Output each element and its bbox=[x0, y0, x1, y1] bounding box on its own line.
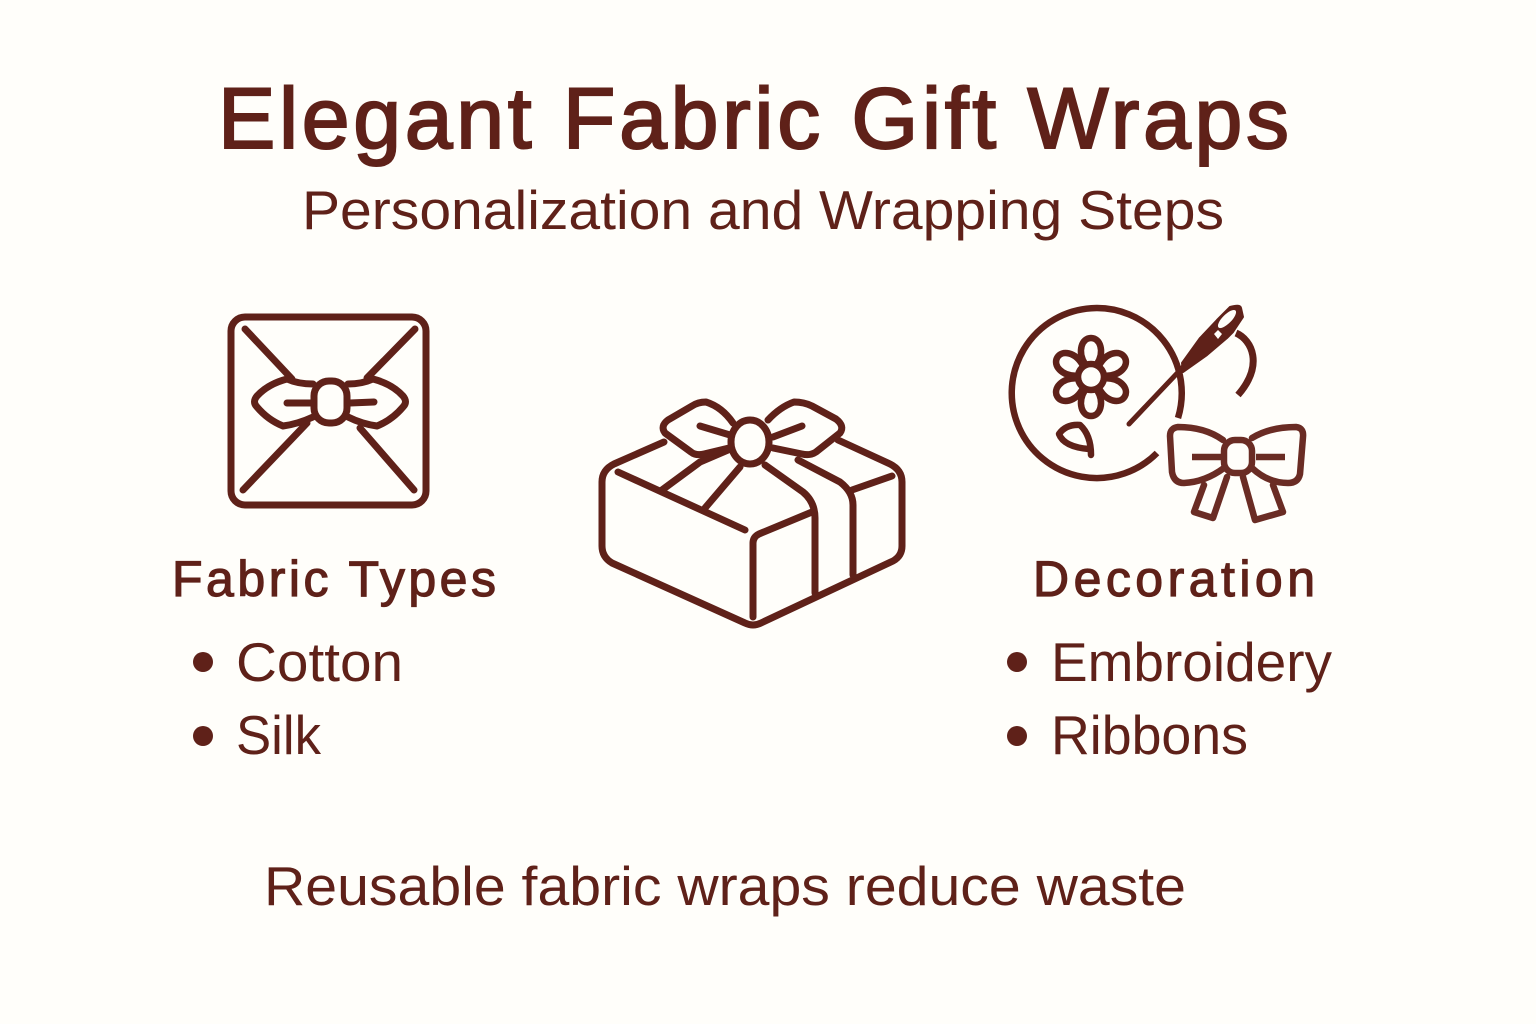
list: decorations bbox=[1007, 631, 1332, 766]
needle bbox=[1129, 306, 1253, 424]
footer note: Reusable fabric wraps reduce waste bbox=[264, 855, 1186, 917]
list: fabrics bbox=[193, 631, 403, 766]
subtitle: Personalization and Wrapping Steps bbox=[302, 179, 1224, 241]
ribbon bow bbox=[1170, 427, 1303, 520]
heading: decoration: Decoration bbox=[1033, 551, 1315, 607]
embroidery hoop bbox=[1012, 308, 1182, 478]
panel: decoration bbox=[1007, 551, 1332, 766]
icon: folded fabric square with bow bbox=[231, 317, 426, 505]
title: Elegant Fabric Gift Wraps bbox=[218, 71, 1289, 167]
panel: fabric types bbox=[172, 551, 496, 766]
embroidered leaf bbox=[1059, 425, 1091, 455]
list: fabrics: Silk bbox=[236, 704, 321, 766]
icon: wrapped gift box bbox=[602, 402, 902, 625]
list: decorations: Ribbons bbox=[1051, 704, 1248, 766]
list: fabrics: Cotton bbox=[236, 631, 403, 693]
embroidered flower bbox=[1052, 338, 1130, 416]
icon: embroidery hoop, needle and bow bbox=[1012, 306, 1303, 520]
heading: fabric types: Fabric Types bbox=[172, 551, 496, 607]
list: decorations: Embroidery bbox=[1051, 631, 1332, 693]
